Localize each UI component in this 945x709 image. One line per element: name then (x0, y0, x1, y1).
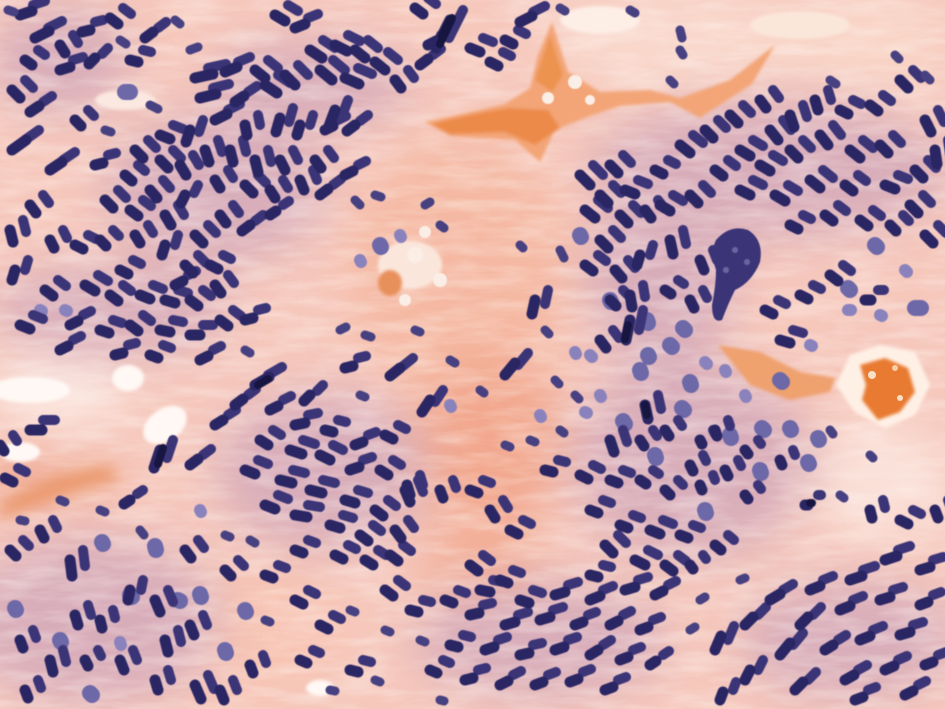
orange vessel: right (718, 345, 930, 428)
small vacuolated spaces (399, 75, 595, 306)
orange streak: left (0, 465, 120, 520)
orange haemorrhage and vessels: top centre (425, 22, 775, 162)
giant multinucleated cell (712, 228, 761, 321)
small orange deposit: centre (378, 270, 402, 296)
